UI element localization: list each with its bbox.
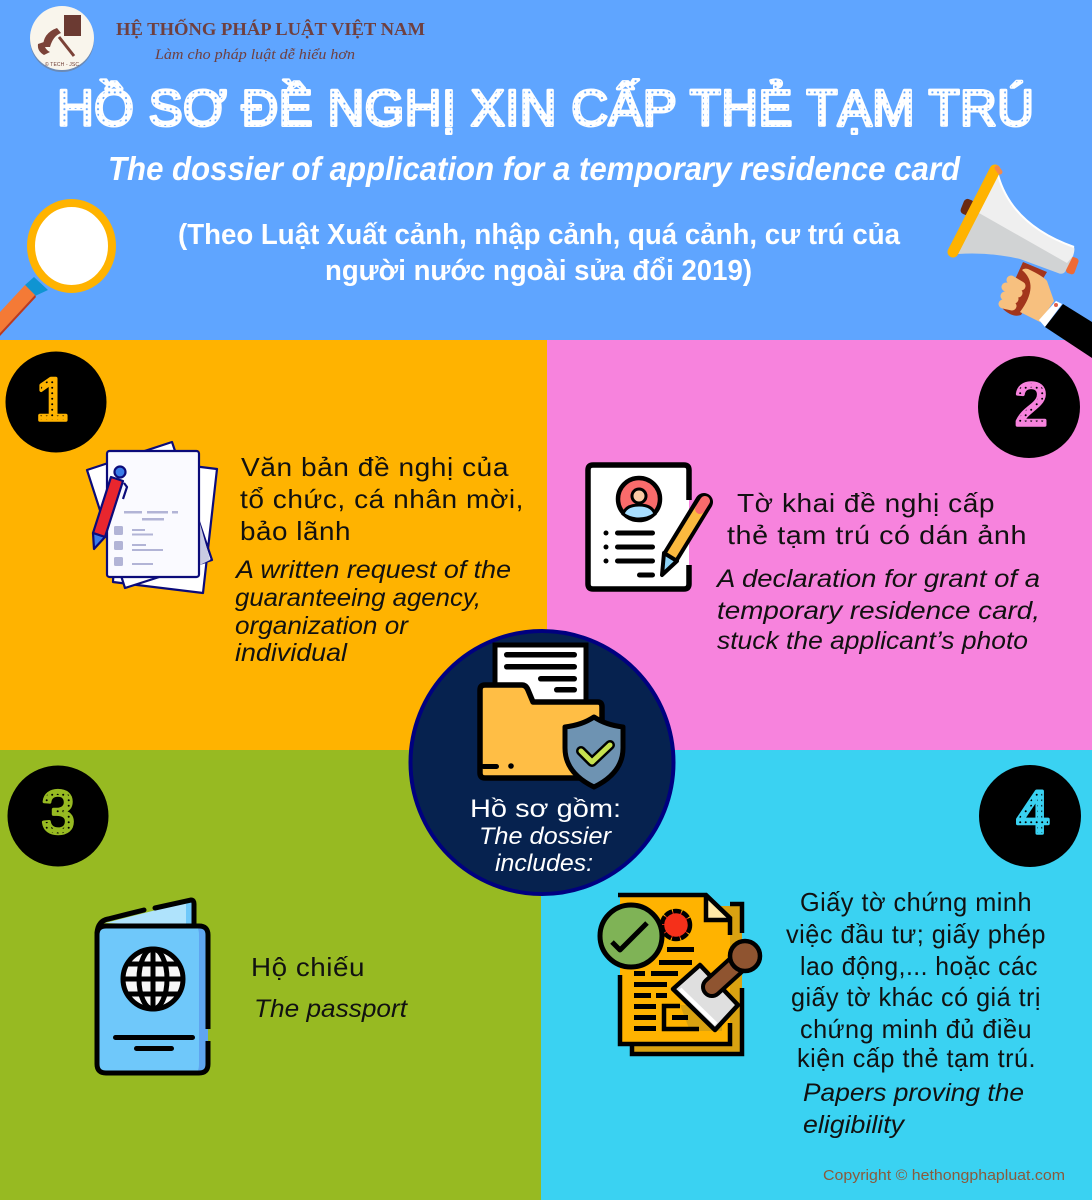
text: central English: includes: xyxy=(495,850,593,877)
logo name: HỆ THỐNG PHÁP LUẬT VIỆT NAM xyxy=(116,18,425,39)
text: item 1 Vietnamese: tổ chức, cá nhân mời, xyxy=(240,484,524,514)
text: item 4 Vietnamese xyxy=(786,887,1046,1073)
text: item 3 Vietnamese: Hộ chiếu xyxy=(251,952,365,982)
badge: number 1 xyxy=(6,352,106,452)
text: item 2 English xyxy=(715,565,1040,655)
text: item 4 Vietnamese: Giấy tờ chứng minh xyxy=(800,887,1032,917)
text: item 2 Vietnamese: thẻ tạm trú có dán ảnh xyxy=(727,520,1027,550)
text: item 4 Vietnamese: chứng minh đủ điều xyxy=(800,1014,1032,1044)
text: item 1 English xyxy=(234,556,511,667)
text: item 1 Vietnamese: bảo lãnh xyxy=(240,516,351,546)
text: item 1 Vietnamese xyxy=(240,452,524,546)
panel: item 4 background xyxy=(541,750,1092,1200)
text: item 2 English: temporary residence card, xyxy=(717,597,1040,625)
text: item 4 Vietnamese: việc đầu tư; giấy phép xyxy=(786,919,1046,949)
text: item 4 Vietnamese: giấy tờ khác có giá trị xyxy=(791,982,1041,1012)
panel: item 2 background xyxy=(547,340,1092,750)
text: item 2 Vietnamese: Tờ khai đề nghị cấp xyxy=(737,488,995,518)
text: item 2 English: stuck the applicant’s photo xyxy=(717,627,1028,655)
text: item 1 English: A written request of the xyxy=(234,556,511,584)
icon: passport xyxy=(97,900,208,1073)
legal reference: người nước ngoài sửa đổi 2019) xyxy=(325,255,752,287)
icon: logo: © TECH - JSC xyxy=(45,61,79,68)
badge: number 1: 1 xyxy=(35,366,69,433)
text: item 4 English xyxy=(803,1079,1024,1139)
badge: number 4 xyxy=(979,765,1081,867)
text: central heading: Hồ sơ gồm: xyxy=(470,795,621,823)
legal reference xyxy=(178,219,901,287)
panel: central circle xyxy=(410,631,674,894)
badge: number 3: 3 xyxy=(41,779,75,846)
icon: megaphone with hand xyxy=(953,168,1092,358)
panel: header background xyxy=(0,0,1092,341)
text: item 4 Vietnamese: kiện cấp thẻ tạm trú. xyxy=(797,1043,1036,1073)
text: central English xyxy=(479,823,612,877)
badge: number 3 xyxy=(8,766,108,866)
text: item 3 English: The passport xyxy=(254,995,408,1023)
panel: item 1 background xyxy=(0,340,547,750)
legal reference: (Theo Luật Xuất cảnh, nhập cảnh, quá cảnh, cư trú của xyxy=(178,219,901,251)
text: item 1 Vietnamese: Văn bản đề nghị của xyxy=(241,452,509,482)
icon: certified paper with stamp xyxy=(600,895,760,1054)
text: item 4 English: Papers proving the xyxy=(803,1079,1024,1107)
icon: logo xyxy=(30,6,94,72)
icon: folder with shield xyxy=(480,645,623,787)
icon: declaration form with pencil xyxy=(588,465,705,589)
text: item 2 Vietnamese xyxy=(727,488,1027,550)
text: item 4 English: eligibility xyxy=(803,1111,906,1139)
icon: stacked documents with pen xyxy=(87,442,217,593)
badge: number 2 xyxy=(978,356,1080,458)
icon: magnifying glass xyxy=(0,203,112,336)
logo slogan: Làm cho pháp luật dễ hiểu hơn xyxy=(154,47,355,63)
subtitle: The dossier of application for a temporary residence card xyxy=(108,150,961,187)
text: central English: The dossier xyxy=(479,823,612,850)
badge: number 2: 2 xyxy=(1014,371,1048,438)
badge: number 4: 4 xyxy=(1016,779,1050,846)
copyright: Copyright © hethongphapluat.com xyxy=(823,1167,1065,1184)
panel: item 3 background xyxy=(0,750,541,1200)
text: item 2 English: A declaration for grant of a xyxy=(715,565,1040,593)
title: HỒ SƠ ĐỀ NGHỊ XIN CẤP THẺ TẠM TRÚ xyxy=(57,78,1034,136)
text: item 1 English: individual xyxy=(235,639,349,667)
text: item 1 English: guaranteeing agency, xyxy=(235,584,481,612)
text: item 1 English: organization or xyxy=(235,612,410,640)
text: item 4 Vietnamese: lao động,... hoặc các xyxy=(800,951,1038,981)
